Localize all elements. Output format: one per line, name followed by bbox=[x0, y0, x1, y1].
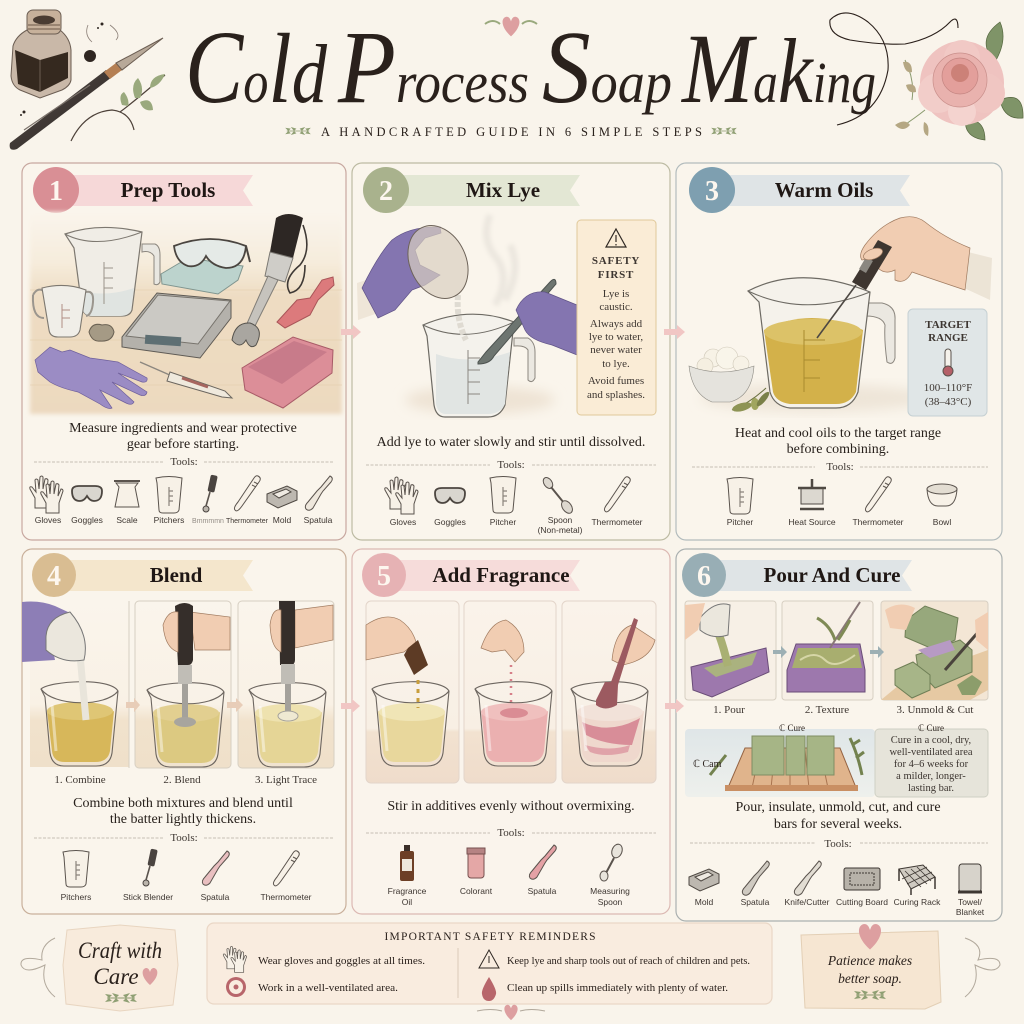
tool labels: Measuring bbox=[590, 886, 630, 896]
icon: red spatula bbox=[277, 277, 334, 328]
title swash bbox=[830, 13, 958, 125]
icon: blender bbox=[203, 475, 218, 512]
heading: step 4 bbox=[32, 553, 253, 597]
heading: step 1 bbox=[33, 167, 253, 213]
tool labels: Spatula bbox=[304, 515, 333, 525]
tools row: Tools: bbox=[170, 832, 198, 844]
callout: cure note: well-ventilated area bbox=[889, 747, 973, 758]
tools row bbox=[30, 456, 333, 525]
heading: step 2: Mix Lye bbox=[466, 178, 540, 202]
icon: glass pitcher with water bbox=[423, 314, 535, 417]
callout: safety first: caustic. bbox=[599, 301, 633, 313]
sub-panel 3: light trace bbox=[238, 601, 334, 768]
tools row: Tools: bbox=[497, 459, 525, 471]
tool labels: Colorant bbox=[460, 886, 493, 896]
sub-panel 2: colorant bbox=[464, 601, 556, 783]
tool labels: Goggles bbox=[71, 515, 103, 525]
heading: step 3: Warm Oils bbox=[775, 178, 873, 202]
header bbox=[10, 10, 1023, 150]
icon: heart bbox=[859, 924, 881, 950]
tool labels bbox=[695, 897, 985, 917]
panel: step 6 pour and cure bbox=[676, 549, 1002, 921]
tool labels: Spatula bbox=[741, 897, 770, 907]
arrow: step 1 to 2 bbox=[341, 325, 361, 339]
illustration: lye into water bbox=[357, 215, 577, 417]
icon: pen sprig bbox=[71, 74, 165, 141]
icon: spatula bbox=[742, 861, 769, 895]
note: patience makes better soap bbox=[801, 924, 941, 1009]
caption: before combining. bbox=[787, 442, 889, 457]
curing rack scene bbox=[685, 723, 875, 797]
callout: target range: RANGE bbox=[928, 332, 968, 344]
title: Process bbox=[337, 10, 529, 125]
scene label: ℂ Cam bbox=[693, 759, 722, 770]
caption bbox=[735, 800, 941, 832]
icon: spatula bbox=[529, 845, 556, 879]
note: patience makes better soap: better soap. bbox=[838, 971, 902, 986]
icon: butter bowl bbox=[689, 347, 754, 402]
icon: mold bbox=[689, 869, 719, 891]
tool labels: Spatula bbox=[528, 886, 557, 896]
panel: safety reminders: IMPORTANT SAFETY REMINDERS bbox=[384, 931, 596, 943]
heading: step 4: 4 bbox=[47, 561, 61, 592]
callout: safety first: never water bbox=[590, 344, 642, 356]
callout: safety first: SAFETY bbox=[592, 255, 640, 267]
arrow: combine to blend bbox=[126, 698, 140, 712]
tool labels: Bowl bbox=[933, 517, 951, 527]
note: craft with care: Care bbox=[93, 964, 139, 989]
callout: safety first: to lye. bbox=[602, 358, 630, 370]
tool labels: Thermometer bbox=[260, 892, 312, 902]
sub-panel 2: texture bbox=[782, 601, 873, 700]
icon: sprig bbox=[105, 993, 137, 1003]
illustration: tools on table bbox=[30, 212, 342, 414]
step labels: 1. Combine bbox=[54, 774, 106, 786]
tool labels: Thermometer bbox=[852, 517, 904, 527]
tool labels: Thermometer bbox=[591, 517, 643, 527]
arrow: step 2 to 3 bbox=[664, 325, 685, 339]
tools row bbox=[34, 832, 333, 902]
step labels: 2. Blend bbox=[163, 774, 201, 786]
icon: pitchers bbox=[63, 850, 89, 887]
icon: gloves bbox=[385, 477, 418, 514]
icon: heart bbox=[143, 968, 157, 985]
icon: ink bottle bbox=[11, 10, 71, 98]
tool labels: Gloves bbox=[35, 515, 61, 525]
icon: raw mineral bbox=[89, 324, 114, 341]
icon: heat source bbox=[798, 479, 826, 509]
icon: sprig bbox=[854, 990, 886, 1000]
icon: thumb bbox=[862, 246, 884, 262]
title: Cold bbox=[185, 10, 328, 125]
icon: right flourish bbox=[965, 938, 1000, 997]
sub-panel 2: blend bbox=[135, 601, 231, 768]
icon: colorant bbox=[467, 848, 485, 878]
icon: top heart ornament bbox=[485, 17, 537, 36]
callout: target range: (38–43°C) bbox=[925, 396, 972, 408]
step labels bbox=[713, 704, 974, 716]
tool labels: Towel/ bbox=[958, 897, 983, 907]
sub-panel 1: fragrance oil bbox=[366, 601, 459, 783]
tool labels: Pitcher bbox=[490, 517, 516, 527]
tool labels: Mold bbox=[695, 897, 713, 907]
icon: olive sprig bbox=[731, 388, 771, 413]
arrow: blend to trace bbox=[227, 698, 243, 712]
icon: pink mold bbox=[242, 337, 333, 408]
caption: gear before starting. bbox=[127, 437, 239, 452]
icon: mold bbox=[267, 486, 297, 508]
icon: fragrance oil bbox=[400, 845, 414, 881]
callout: safety first: Avoid fumes bbox=[588, 375, 644, 387]
title: Soap bbox=[542, 10, 672, 125]
callout: safety first: FIRST bbox=[598, 269, 634, 281]
callout: cure note: lasting bar. bbox=[908, 783, 954, 794]
arrow: step 5 to 6 bbox=[665, 699, 684, 713]
table shadow bbox=[405, 386, 555, 414]
icon: spatula bbox=[305, 476, 332, 510]
tool labels: Thermometer bbox=[226, 518, 269, 525]
illustration: oil with thermometer bbox=[689, 217, 992, 413]
panel: step 3 warm oils bbox=[676, 163, 1002, 540]
tools row bbox=[366, 459, 656, 535]
tools row: Tools: bbox=[826, 461, 854, 473]
tool labels: Fragrance bbox=[388, 886, 427, 896]
tool labels: Spatula bbox=[201, 892, 230, 902]
tool labels bbox=[388, 886, 630, 907]
tool labels: Spoon bbox=[598, 897, 623, 907]
caption: bars for several weeks. bbox=[774, 817, 902, 832]
icon: fountain pen bbox=[10, 38, 163, 150]
sub-panel 3: unmold and cut bbox=[881, 601, 988, 700]
reminder: Wear gloves and goggles at all times. bbox=[258, 956, 425, 967]
caption: Pour, insulate, unmold, cut, and cure bbox=[735, 800, 941, 815]
subtitle: A HANDCRAFTED GUIDE IN 6 SIMPLE STEPS bbox=[321, 125, 702, 139]
tool labels: Knife/Cutter bbox=[785, 897, 830, 907]
icon: stick blender bbox=[143, 849, 158, 886]
tool labels: Mold bbox=[273, 515, 291, 525]
arrow: step 4 to 5 bbox=[341, 699, 360, 713]
icon: pitchers bbox=[156, 476, 182, 513]
note: craft with care bbox=[63, 925, 178, 1011]
icon: bowl bbox=[927, 484, 957, 506]
icon: rose bbox=[895, 22, 1023, 140]
caption: Stir in additives evenly without overmixing. bbox=[387, 799, 635, 814]
callout: cure note bbox=[875, 723, 988, 797]
reminder: Clean up spills immediately with plenty of water. bbox=[507, 983, 728, 994]
icon: digital scale bbox=[122, 293, 231, 358]
icon: lye bowl bbox=[397, 216, 479, 308]
tools row: Tools: bbox=[170, 456, 198, 468]
icon: large pitcher bbox=[65, 227, 160, 316]
icon: knife cutter bbox=[794, 861, 821, 895]
icon: scale bbox=[114, 481, 140, 507]
heading: step 2: 2 bbox=[379, 176, 393, 207]
heading: step 1: 1 bbox=[49, 176, 63, 207]
icon: thermometer bbox=[943, 349, 953, 376]
tools row: Tools: bbox=[497, 827, 525, 839]
tool labels: Heat Source bbox=[788, 517, 836, 527]
icon: curing rack bbox=[899, 865, 935, 895]
callout: target range: TARGET bbox=[925, 319, 971, 331]
icon: thermometer bbox=[234, 476, 260, 511]
icon: bottom heart ornament bbox=[477, 1005, 545, 1020]
reminder: Work in a well-ventilated area. bbox=[258, 983, 398, 994]
icon: goggles on towel bbox=[161, 239, 250, 294]
icon: gloved right hand and spoon bbox=[478, 279, 577, 364]
icon: pitcher of oil bbox=[748, 278, 895, 408]
panel: step 4 blend bbox=[22, 549, 346, 914]
panel: step 2 mix lye bbox=[352, 163, 670, 540]
note: patience makes better soap: Patience makes bbox=[827, 953, 912, 968]
heading: step 5: Add Fragrance bbox=[432, 563, 570, 587]
icon: left flourish bbox=[21, 938, 55, 997]
heading: step 3 bbox=[689, 167, 910, 213]
callout: cure note: Cure in a cool, dry, bbox=[891, 735, 971, 746]
panel: step 5 add fragrance bbox=[352, 549, 670, 914]
title: Making bbox=[680, 13, 876, 124]
icon: pitcher bbox=[490, 476, 516, 513]
icon: soap bars bbox=[752, 736, 834, 775]
icon: rack bbox=[725, 748, 858, 791]
tool labels: Goggles bbox=[434, 517, 466, 527]
tool labels: Bmmmmn bbox=[192, 518, 224, 525]
caption bbox=[69, 421, 297, 452]
caption: Measure ingredients and wear protective bbox=[69, 421, 297, 436]
step labels: 2. Texture bbox=[805, 704, 849, 716]
tools row bbox=[366, 827, 656, 907]
icon: gloves bbox=[30, 476, 63, 513]
icon: thermometer bbox=[604, 477, 630, 512]
icon: probe thermometer bbox=[817, 240, 892, 338]
icon: gloved left hand bbox=[357, 227, 441, 320]
step labels bbox=[54, 774, 317, 786]
heading: step 5 bbox=[362, 553, 580, 597]
tool labels: (Non-metal) bbox=[538, 525, 583, 535]
caption: the batter lightly thickens. bbox=[110, 812, 256, 827]
tool labels bbox=[35, 515, 333, 525]
panel: step 1 prep tools bbox=[22, 163, 346, 540]
icon: goggles bbox=[435, 488, 465, 503]
step labels: 1. Pour bbox=[713, 704, 745, 716]
icon: small pitcher bbox=[33, 285, 93, 337]
tool labels: Gloves bbox=[390, 517, 416, 527]
callout: safety first: and splashes. bbox=[587, 389, 645, 401]
icon: spoon bbox=[541, 476, 575, 515]
sub-panel 1: combine bbox=[22, 601, 129, 768]
tool labels: Cutting Board bbox=[836, 897, 888, 907]
caption: Heat and cool oils to the target range bbox=[735, 426, 941, 441]
heading: step 1: Prep Tools bbox=[121, 178, 215, 202]
icon: right laurel bbox=[711, 127, 737, 135]
heading: step 6: 6 bbox=[697, 561, 711, 592]
tools row bbox=[689, 838, 988, 917]
callout: target range: 100–110°F bbox=[924, 382, 972, 394]
heading: step 2 bbox=[363, 167, 580, 213]
tool labels: Blanket bbox=[956, 907, 985, 917]
icon: purple gloves bbox=[35, 347, 147, 408]
icon: goggles bbox=[72, 486, 102, 501]
heading: step 5: 5 bbox=[377, 561, 391, 592]
icon: warning bbox=[479, 950, 499, 968]
arrow: pour to texture bbox=[773, 646, 787, 658]
icon: fan bbox=[226, 977, 246, 997]
caption bbox=[73, 796, 293, 827]
icon: cutting board bbox=[844, 868, 880, 890]
footer bbox=[21, 923, 1000, 1020]
callout: safety first bbox=[577, 220, 656, 415]
icon: spatula bbox=[202, 851, 229, 885]
tools row bbox=[692, 461, 988, 527]
icon: left laurel bbox=[285, 127, 311, 135]
arrow: texture to cut bbox=[870, 646, 884, 658]
icon: thermometer bbox=[273, 851, 299, 886]
caption bbox=[735, 426, 941, 457]
tool labels bbox=[727, 517, 951, 527]
tool labels: Oil bbox=[402, 897, 412, 907]
icon: thermometer bbox=[865, 477, 891, 512]
lye stream bbox=[458, 295, 466, 340]
icon: warning triangle bbox=[606, 229, 626, 247]
step labels: 3. Light Trace bbox=[255, 774, 317, 786]
heading: step 6: Pour And Cure bbox=[764, 563, 900, 587]
tool labels: Stick Blender bbox=[123, 892, 173, 902]
heading: step 3: 3 bbox=[705, 176, 719, 207]
panel: safety reminders bbox=[207, 923, 772, 1004]
icon: drop bbox=[482, 977, 496, 1001]
icon: ink splatter bbox=[20, 22, 118, 116]
sub-panel 3: swirl bbox=[562, 601, 656, 783]
title bbox=[185, 10, 876, 125]
icon: herb bbox=[710, 738, 864, 775]
icon: towel bbox=[958, 864, 982, 892]
caption: Combine both mixtures and blend until bbox=[73, 796, 293, 811]
step labels: 3. Unmold & Cut bbox=[896, 704, 974, 716]
steam bbox=[486, 215, 515, 305]
callout: safety first: lye to water, bbox=[589, 331, 643, 343]
tool labels bbox=[61, 892, 312, 902]
scene top label: ℂ Cure bbox=[779, 723, 805, 733]
callout: safety first: Always add bbox=[590, 318, 643, 330]
tool labels: Pitchers bbox=[61, 892, 91, 902]
tool labels: Spoon bbox=[548, 515, 573, 525]
callout: cure note: for 4–6 weeks for bbox=[894, 759, 969, 770]
callout: cure note: a milder, longer- bbox=[896, 771, 966, 782]
sub-panel 1: pour bbox=[685, 601, 776, 700]
tool labels: Scale bbox=[116, 515, 138, 525]
icon: thermometer bbox=[140, 362, 232, 398]
tool labels: Pitchers bbox=[154, 515, 184, 525]
icon: pitcher bbox=[727, 478, 753, 514]
reminder: Keep lye and sharp tools out of reach of children and pets. bbox=[507, 956, 750, 967]
icon: gloves bbox=[223, 946, 246, 972]
tools row: Tools: bbox=[824, 838, 852, 850]
tool labels: Curing Rack bbox=[894, 897, 941, 907]
heading: step 4: Blend bbox=[150, 563, 203, 587]
tool labels bbox=[390, 515, 643, 535]
callout: cure note: ℂ Cure bbox=[918, 723, 944, 733]
icon: stick blender bbox=[232, 214, 307, 347]
icon: hand bbox=[861, 217, 992, 300]
tool labels: Pitcher bbox=[727, 517, 753, 527]
caption: Add lye to water slowly and stir until dissolved. bbox=[377, 435, 645, 450]
callout: safety first: Lye is bbox=[603, 288, 629, 300]
heading: step 6 bbox=[682, 553, 912, 597]
icon: measuring spoon bbox=[600, 843, 624, 881]
callout: target range bbox=[908, 309, 987, 416]
note: craft with care: Craft with bbox=[78, 938, 162, 963]
